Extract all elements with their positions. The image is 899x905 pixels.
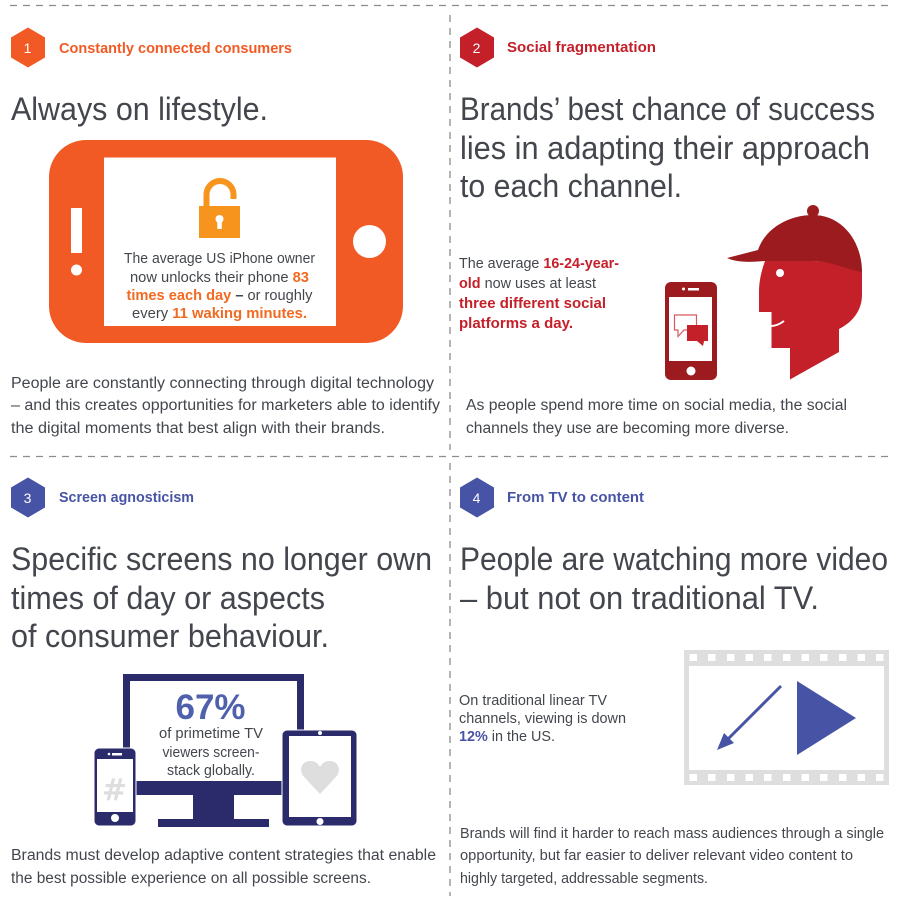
icon: number 1 hexagon: 1 [24, 40, 32, 56]
social statistic text [459, 256, 619, 332]
body text 4: opportunity, but far easier to deliver relevant video content to [460, 848, 853, 864]
heading 2: Brands’ best chance of success [460, 91, 875, 127]
icon: number 2 hexagon [460, 28, 494, 68]
icon: open padlock [199, 181, 240, 238]
body text 1 [11, 375, 440, 437]
icon: phone with hash [94, 748, 136, 826]
icon: tablet with heart [282, 730, 357, 826]
phone statistic text: The average US iPhone owner [124, 251, 315, 267]
section label 4: From TV to content [507, 490, 644, 506]
heading 3: times of day or aspects [11, 580, 325, 616]
icon: phone with hash: # [102, 773, 127, 808]
social statistic text: three different social [459, 296, 606, 312]
social statistic text: old now uses at least [459, 276, 596, 292]
icon: number 3 hexagon: 3 [24, 490, 32, 506]
heading 3: of consumer behaviour. [11, 618, 329, 654]
monitor statistic text: stack globally. [167, 763, 255, 779]
phone statistic text: now unlocks their phone 83 [130, 270, 309, 286]
heading 1: Always on lifestyle. [11, 91, 268, 127]
icon: film strip with play triangle and down arrow [684, 650, 889, 785]
TV statistic text: channels, viewing is down [459, 711, 626, 727]
phone statistic text: every 11 waking minutes. [132, 306, 307, 322]
body text 3 [11, 847, 436, 887]
social statistic text: The average 16-24-year- [459, 256, 619, 272]
panel: from TV to content [459, 478, 889, 887]
panel: social fragmentation [459, 28, 875, 437]
body text 2 [466, 397, 847, 437]
heading 2: lies in adapting their approach [460, 130, 870, 166]
monitor statistic text: of primetime TV [159, 726, 263, 742]
TV statistic text: On traditional linear TV [459, 693, 607, 709]
social statistic text: platforms a day. [459, 316, 573, 332]
TV statistic text: 12% in the US. [459, 729, 555, 745]
section label 1: Constantly connected consumers [59, 41, 292, 57]
TV statistic text [459, 693, 626, 745]
body text 1: – and this creates opportunities for marketers able to identify [11, 397, 440, 414]
icon: number 3 hexagon [11, 478, 45, 518]
icon: head in red cap [727, 205, 862, 380]
body text 3: the best possible experience on all possible screens. [11, 870, 371, 887]
panel: screen agnosticism [11, 478, 436, 887]
heading 4 [460, 541, 888, 616]
section label 2: Social fragmentation [507, 40, 656, 56]
devices illustration with statistic [94, 674, 357, 827]
body text 4 [460, 826, 884, 887]
icon: monitor [123, 674, 304, 827]
icon: number 4 hexagon [460, 478, 494, 518]
body text 1: the digital moments that best align with their brands. [11, 420, 385, 437]
monitor statistic text [159, 688, 263, 779]
icon: number 1 hexagon [11, 28, 45, 68]
phone statistic text [124, 251, 315, 322]
icon: smartphone with chat bubbles [665, 282, 717, 380]
body text 2: channels they use are becoming more diverse. [466, 420, 789, 437]
heading 3 [11, 541, 432, 654]
body text 4: highly targeted, addressable segments. [460, 871, 708, 887]
monitor statistic text: viewers screen- [162, 745, 260, 761]
heading 3: Specific screens no longer own [11, 541, 432, 577]
panel: constantly connected consumers [11, 28, 440, 437]
heading 2: to each channel. [460, 168, 682, 204]
section label 3: Screen agnosticism [59, 490, 194, 506]
body text 1: People are constantly connecting through digital technology [11, 375, 434, 392]
body text 3: Brands must develop adaptive content strategies that enable [11, 847, 436, 864]
heading 2 [460, 91, 875, 204]
phone statistic text: times each day – or roughly [126, 288, 313, 304]
icon: number 2 hexagon: 2 [473, 40, 481, 56]
body text 2: As people spend more time on social media, the social [466, 397, 847, 414]
body text 4: Brands will find it harder to reach mass audiences through a single [460, 826, 884, 842]
icon: number 4 hexagon: 4 [473, 490, 481, 506]
heading 4: – but not on traditional TV. [460, 580, 819, 616]
monitor statistic text: 67% [176, 688, 246, 727]
phone illustration with statistic [49, 140, 403, 343]
